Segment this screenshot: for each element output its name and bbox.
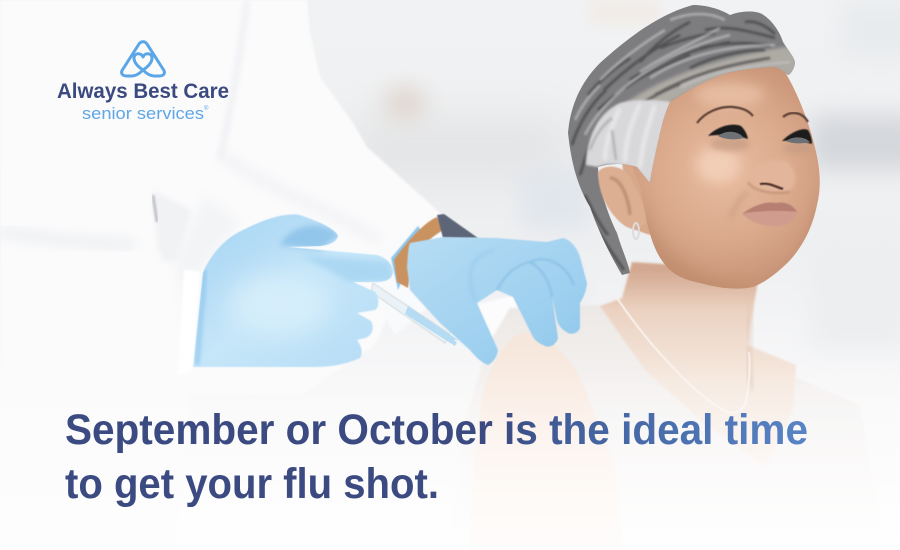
tan watch strap	[394, 217, 445, 288]
lips	[742, 203, 797, 226]
right eye	[782, 129, 812, 144]
left eye	[708, 125, 748, 139]
logo	[57, 42, 229, 123]
nose	[749, 160, 796, 192]
palm highlight	[230, 275, 330, 335]
logo tagline: senior services	[82, 105, 204, 123]
ear	[598, 167, 646, 229]
light strands	[575, 14, 790, 135]
hair	[560, 0, 800, 280]
sleeve cuff and watch	[375, 214, 478, 335]
logo name: Always Best Care	[57, 80, 229, 103]
coat placket	[152, 190, 192, 262]
doctor white coat	[0, 0, 440, 550]
sleeve crease	[220, 0, 247, 160]
logo icon: triangle with heart	[122, 42, 164, 76]
right brow	[783, 113, 808, 122]
face	[632, 67, 820, 289]
neck and chest	[600, 262, 796, 468]
white top	[448, 305, 885, 550]
warm grey sweep	[626, 46, 795, 102]
right glove on shoulder	[407, 237, 587, 365]
nostril	[760, 184, 783, 189]
finger shading	[300, 255, 392, 282]
dark strands	[572, 22, 775, 270]
cheek highlight	[696, 147, 740, 183]
skin underlay near temple	[622, 160, 660, 235]
smile crease	[732, 193, 746, 214]
gap shadow between sleeve and body	[175, 195, 240, 345]
registered mark: ®	[204, 105, 209, 112]
body fold shadow	[0, 232, 135, 245]
silver temple patch	[586, 100, 672, 186]
white gap under glove	[476, 295, 522, 345]
headline line 2: to get your flu shot.	[65, 460, 439, 508]
white bottom fade	[0, 370, 900, 550]
necklace	[617, 298, 750, 413]
bare upper arm	[470, 333, 623, 550]
earring	[633, 223, 639, 239]
syringe	[371, 283, 492, 364]
thumb shading	[280, 225, 340, 250]
eye sockets	[710, 137, 750, 151]
headline	[65, 406, 808, 508]
left glove holding syringe	[193, 214, 393, 367]
left cuff edge	[178, 270, 200, 376]
neck side shadow	[748, 300, 752, 390]
headline line 1: September or October is the ideal time	[65, 406, 808, 454]
forehead light	[695, 83, 765, 107]
blue cuff	[391, 226, 422, 290]
left brow	[697, 107, 753, 123]
watch face	[437, 214, 478, 238]
woman	[475, 5, 820, 478]
jaw shadow	[648, 226, 724, 288]
